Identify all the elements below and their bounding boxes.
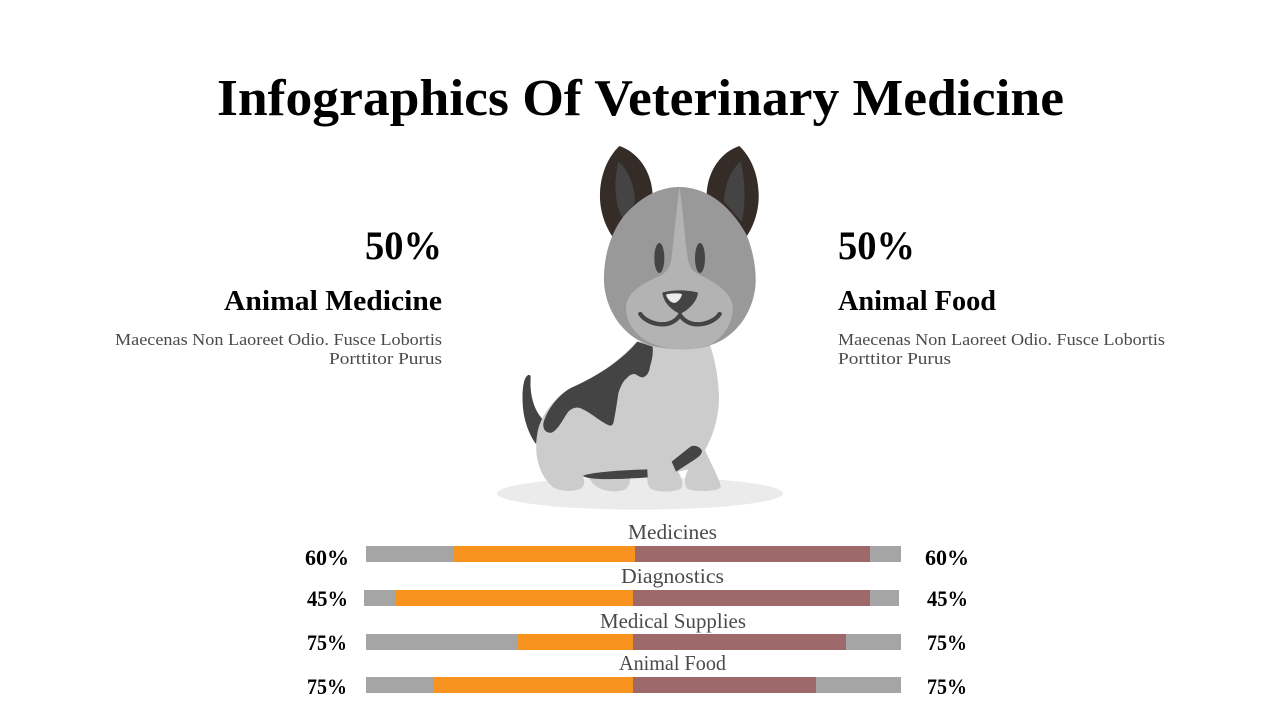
body: [536, 342, 721, 491]
ground shadow: [497, 477, 783, 510]
heading: animal medicine: Animal Medicine: [224, 285, 442, 317]
forehead stripe and muzzle: [626, 187, 733, 349]
tail: [523, 375, 543, 444]
text block: animal medicine description: [115, 330, 442, 368]
bar track: [366, 634, 901, 650]
right eye: [695, 243, 705, 273]
head: [604, 187, 756, 349]
left value: 75%: [307, 674, 347, 699]
text block: animal food description: Porttitor Purus: [838, 349, 951, 368]
label: animal food: Animal Food: [619, 651, 726, 675]
title: Infographics Of Veterinary Medicine: [217, 70, 1064, 127]
maroon segment: [633, 677, 816, 693]
maroon segment: [635, 546, 870, 562]
panel: animal food: [838, 223, 1165, 368]
text block: animal food description: [838, 330, 1165, 368]
label: medicines: Medicines: [628, 520, 717, 544]
text block: animal medicine description: Porttitor Purus: [329, 349, 442, 368]
right ear: [707, 146, 759, 237]
text block: animal food description: Maecenas Non Laoreet Odio. Fusce Lobortis: [838, 330, 1165, 349]
left value: 75%: [307, 630, 347, 655]
left eye: [654, 243, 664, 273]
icon: dog illustration: [497, 146, 783, 510]
label: diagnostics: Diagnostics: [621, 564, 724, 588]
back patch: [543, 342, 653, 433]
panel: animal medicine: [115, 223, 442, 368]
text block: animal medicine description: Maecenas Non Laoreet Odio. Fusce Lobortis: [115, 330, 442, 349]
front leg patch: [672, 446, 702, 472]
left ear: [600, 146, 653, 239]
nose highlight: [666, 293, 682, 303]
mouth: [640, 314, 720, 324]
stat: animal food percent: 50%: [838, 223, 915, 268]
chart: medicines bar: [305, 520, 969, 570]
left inner ear: [615, 162, 635, 222]
maroon segment: [633, 590, 870, 606]
right value: 60%: [925, 545, 969, 570]
belly stripe: [583, 469, 648, 479]
bar track: [364, 590, 899, 606]
chart: animal food bar: [307, 651, 967, 699]
orange segment: [518, 634, 633, 650]
chart: diagnostics bar: [307, 564, 968, 611]
maroon segment: [633, 634, 846, 650]
right value: 45%: [927, 586, 968, 611]
nose: [662, 290, 698, 314]
chart: medical supplies bar: [307, 609, 967, 655]
right value: 75%: [927, 674, 967, 699]
heading: animal food: Animal Food: [838, 285, 996, 317]
right value: 75%: [927, 630, 967, 655]
bar track: [366, 546, 901, 562]
bar track: [366, 677, 901, 693]
orange segment: [453, 546, 635, 562]
orange segment: [434, 677, 633, 693]
back paw: [589, 477, 630, 491]
left value: 45%: [307, 586, 348, 611]
label: medical supplies: Medical Supplies: [600, 609, 746, 633]
left value: 60%: [305, 545, 349, 570]
right inner ear: [724, 162, 745, 222]
stat: animal medicine percent: 50%: [365, 223, 442, 268]
orange segment: [395, 590, 633, 606]
